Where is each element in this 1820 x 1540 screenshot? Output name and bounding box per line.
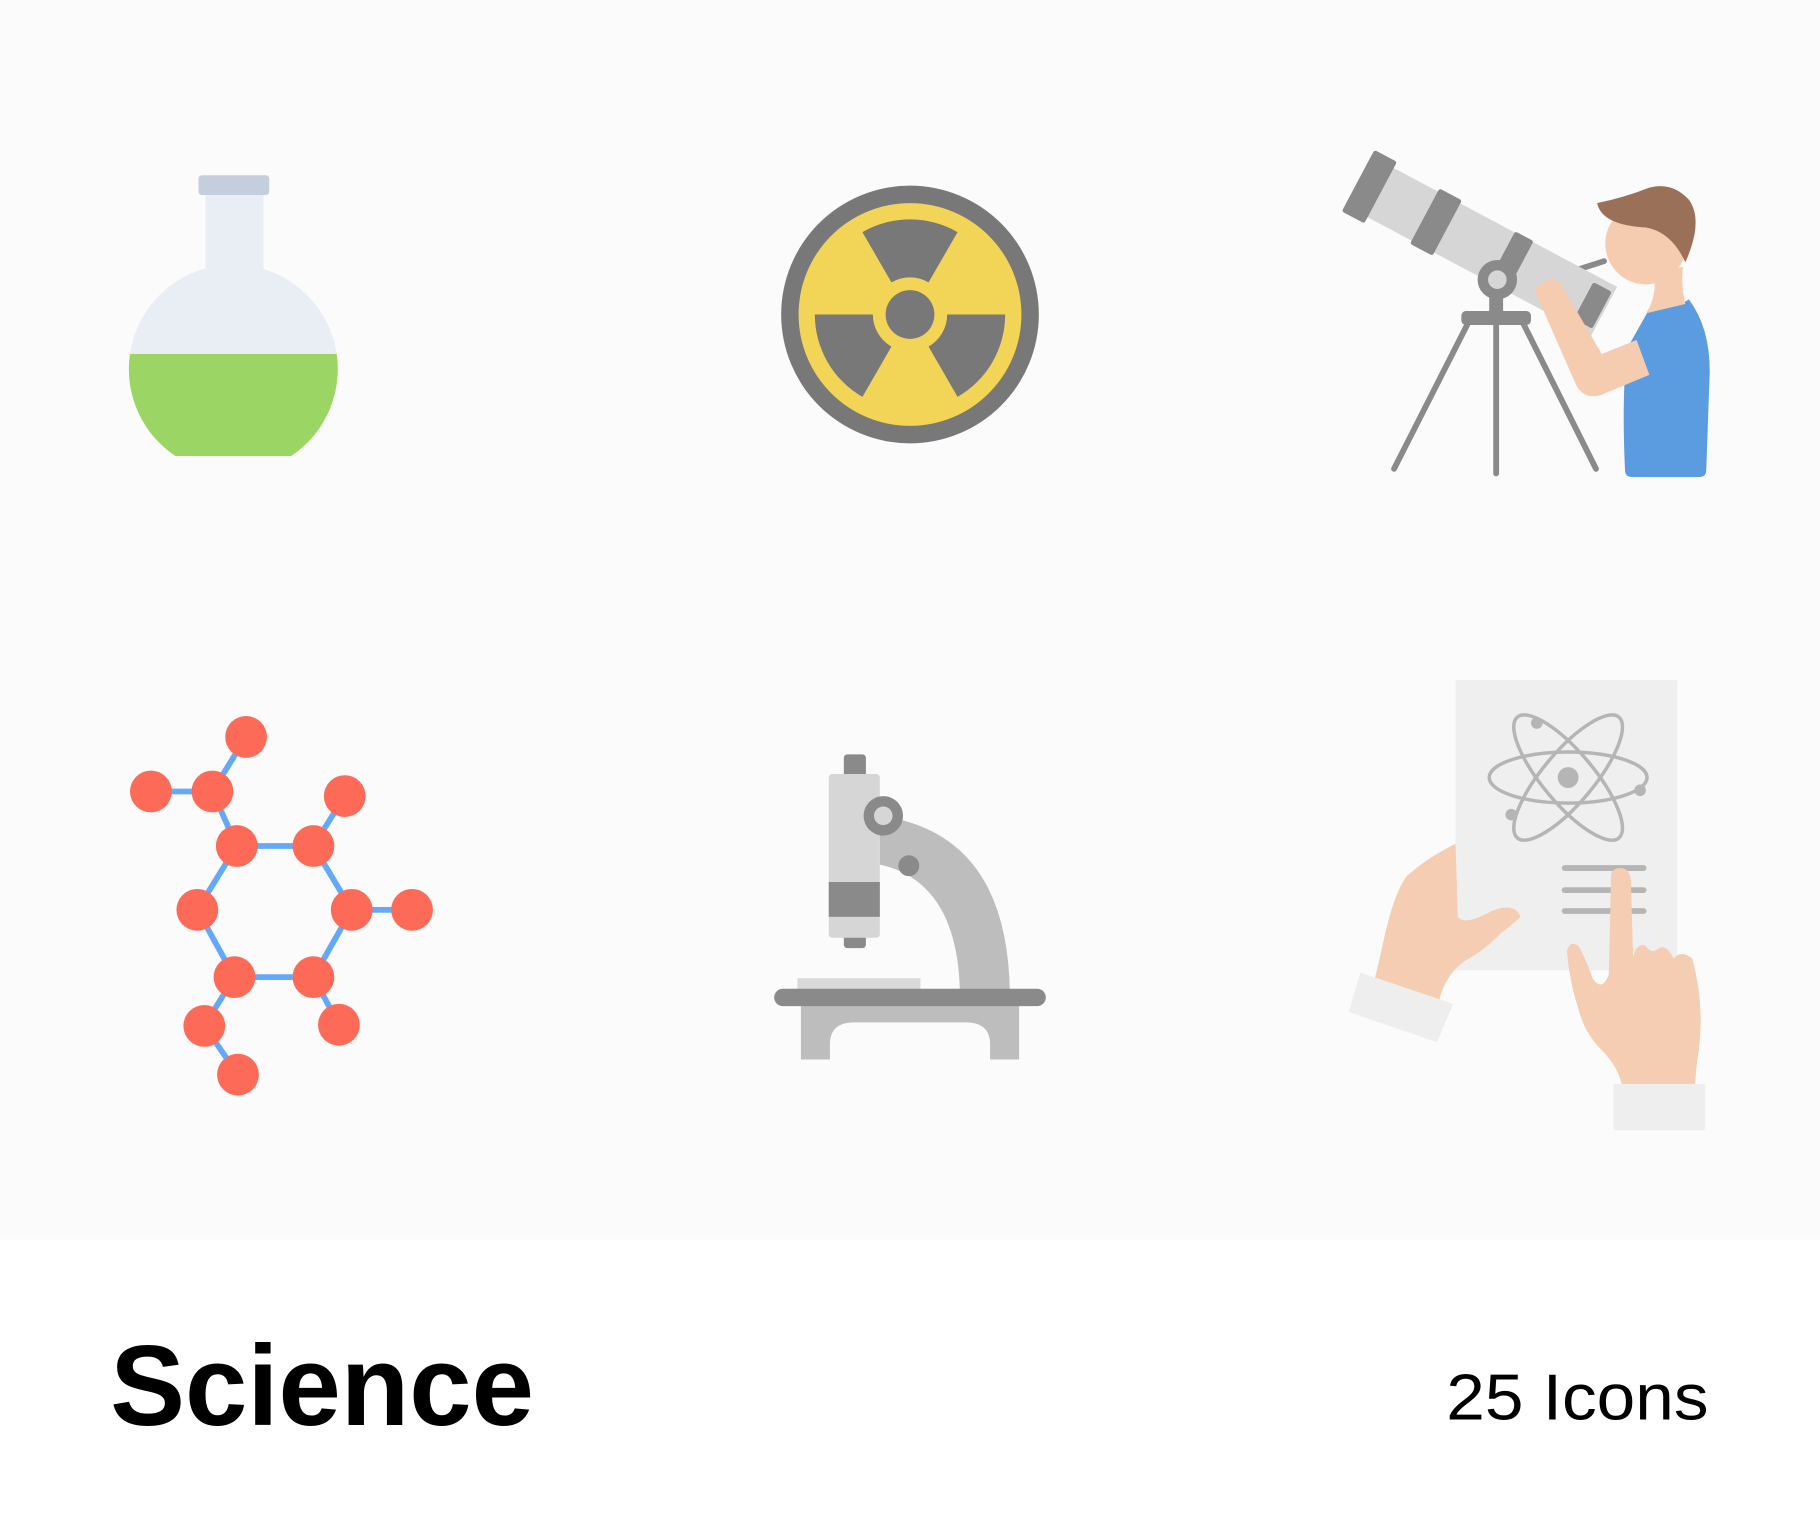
icon: microscope xyxy=(774,754,1046,1060)
icon: astronomer with telescope xyxy=(1342,150,1710,477)
icon: flask xyxy=(128,175,338,456)
icon count label: 25 Icons xyxy=(1446,1360,1709,1433)
icon: hands holding atom document xyxy=(1349,680,1705,1130)
icon: molecule xyxy=(130,716,433,1096)
title: Science xyxy=(110,1323,534,1450)
icon: radiation xyxy=(781,186,1039,443)
infographic canvas xyxy=(114,150,1710,1426)
